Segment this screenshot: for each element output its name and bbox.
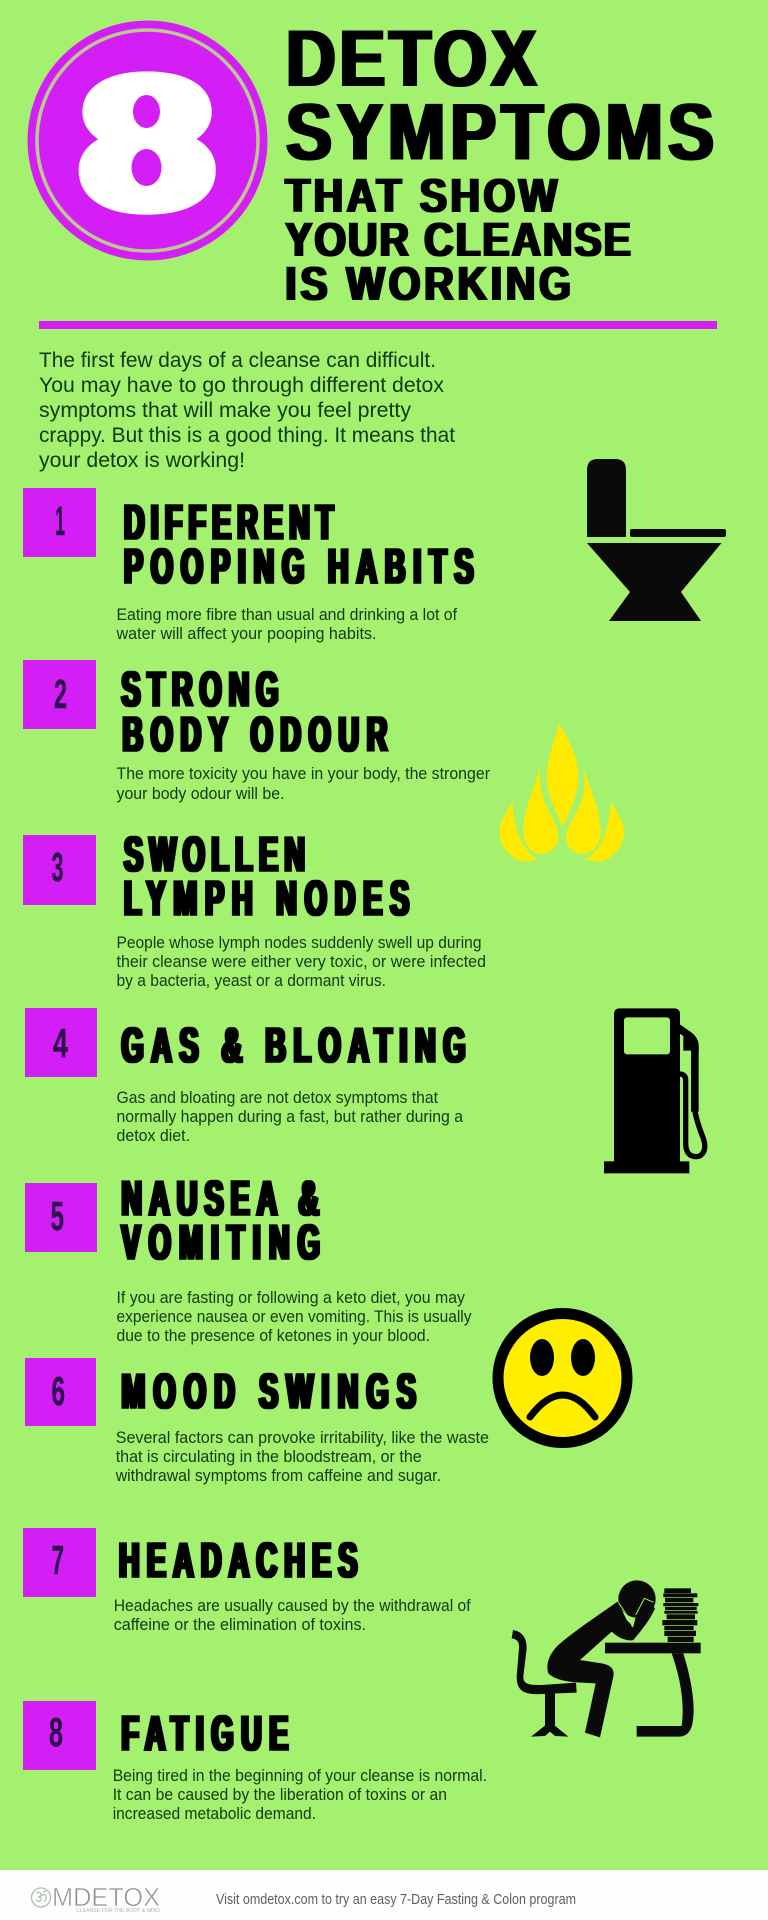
description 6: that is circulating in the bloodstream, or the <box>116 1447 422 1466</box>
description 7: caffeine or the elimination of toxins. <box>114 1615 366 1634</box>
heading 7: HEADACHES <box>119 1534 357 1588</box>
heading 3: LYMPH NODES <box>124 872 409 926</box>
number badge 2: 2 <box>54 671 67 717</box>
number badge 5: 5 <box>50 1193 64 1239</box>
heading 4: GAS & BLOATING <box>122 1019 465 1073</box>
panel: symptom 3 <box>23 828 486 990</box>
description 2 <box>116 764 490 803</box>
heading 1: DIFFERENT <box>124 496 334 550</box>
intro text: your detox is working! <box>39 449 245 472</box>
title: IS WORKING <box>285 258 571 311</box>
logo: om detox: CLEANSE FOR THE BODY & MIND <box>76 1908 160 1914</box>
icon: purple circle with number 8: 8 <box>82 43 213 244</box>
number badge 2 <box>23 660 96 729</box>
title: THAT SHOW <box>285 170 557 223</box>
number badge 6 <box>25 1358 96 1426</box>
description 7: Headaches are usually caused by the withdrawal of <box>114 1596 471 1615</box>
panel: symptom 8 <box>23 1701 487 1823</box>
heading 5: VOMITING <box>122 1216 320 1270</box>
footer bar <box>0 1870 768 1920</box>
icon: flames <box>499 723 624 861</box>
heading 3 <box>124 828 409 926</box>
number badge 5 <box>25 1183 97 1252</box>
description 5: due to the presence of ketones in your blood. <box>116 1326 430 1345</box>
description 4 <box>116 1088 464 1145</box>
description 2: The more toxicity you have in your body, the stronger <box>116 764 490 783</box>
panel: symptom 6 <box>25 1358 489 1485</box>
number badge 3 <box>23 835 96 905</box>
icon: purple circle with number 8 <box>28 20 268 260</box>
description 2: your body odour will be. <box>116 784 284 803</box>
description 8: Being tired in the beginning of your cleanse is normal. <box>113 1766 487 1785</box>
title: DETOX <box>286 13 537 103</box>
description 8: It can be caused by the liberation of toxins or an <box>113 1785 447 1804</box>
title: SYMPTOMS <box>286 86 714 177</box>
intro text: symptoms that will make you feel pretty <box>39 399 412 422</box>
description 6: withdrawal symptoms from caffeine and sugar. <box>115 1466 441 1485</box>
title: YOUR CLEANSE <box>285 214 631 267</box>
description 3: their cleanse were either very toxic, or were infected <box>116 952 486 971</box>
description 1 <box>116 605 457 643</box>
description 5: experience nausea or even vomiting. This is usually <box>116 1307 472 1326</box>
heading 5 <box>122 1172 320 1270</box>
heading 3: SWOLLEN <box>124 828 305 882</box>
heading 2: STRONG <box>122 663 278 717</box>
heading 1 <box>124 496 473 594</box>
footer text: Visit omdetox.com to try an easy 7-Day Fasting & Colon program <box>216 1891 576 1908</box>
description 8: increased metabolic demand. <box>113 1804 316 1823</box>
title <box>285 13 714 311</box>
logo: om detox: MDETOX <box>52 1882 160 1912</box>
description 5: If you are fasting or following a keto diet, you may <box>116 1288 465 1307</box>
number badge 1 <box>23 488 96 557</box>
number badge 7: 7 <box>52 1537 64 1583</box>
description 3: by a bacteria, yeast or a dormant virus. <box>116 971 386 990</box>
description 6 <box>115 1428 489 1485</box>
intro text: crappy. But this is a good thing. It means that <box>39 424 455 447</box>
heading 2 <box>122 663 387 762</box>
heading 6: MOOD SWINGS <box>122 1365 416 1419</box>
description 3 <box>116 933 486 990</box>
number badge 3: 3 <box>52 844 64 890</box>
panel: symptom 1 <box>23 488 473 643</box>
description 4: normally happen during a fast, but rather during a <box>116 1107 464 1126</box>
heading 8: FATIGUE <box>122 1707 288 1761</box>
description 8 <box>113 1766 487 1823</box>
description 5 <box>116 1288 472 1345</box>
number badge 4 <box>25 1008 97 1077</box>
icon: tired person at desk <box>512 1580 701 1737</box>
number badge 7 <box>23 1528 96 1597</box>
intro text: The first few days of a cleanse can difficult. <box>39 349 436 372</box>
panel: symptom 4 <box>25 1008 465 1145</box>
heading 1: POOPING HABITS <box>124 540 473 594</box>
heading 5: NAUSEA & <box>122 1172 319 1226</box>
number badge 4: 4 <box>53 1020 68 1066</box>
description 1: water will affect your pooping habits. <box>116 624 376 643</box>
description 6: Several factors can provoke irritability, like the waste <box>116 1428 489 1447</box>
number badge 8 <box>23 1701 96 1770</box>
panel: symptom 7 <box>23 1528 471 1634</box>
panel: symptom 2 <box>23 660 490 803</box>
icon: fuel pump <box>604 1008 705 1173</box>
description 7 <box>114 1596 471 1634</box>
number badge 1: 1 <box>55 498 65 544</box>
description 4: Gas and bloating are not detox symptoms that <box>116 1088 438 1107</box>
heading 2: BODY ODOUR <box>122 708 387 762</box>
description 4: detox diet. <box>116 1126 190 1145</box>
description 3: People whose lymph nodes suddenly swell up during <box>116 933 482 952</box>
intro text <box>39 349 455 472</box>
intro text: You may have to go through different detox <box>39 374 444 397</box>
number badge 8: 8 <box>49 1709 63 1755</box>
panel: symptom 5 <box>25 1172 472 1345</box>
description 1: Eating more fibre than usual and drinking a lot of <box>116 605 457 624</box>
icon: sad face <box>498 1314 627 1442</box>
icon: toilet <box>587 459 726 621</box>
number badge 6: 6 <box>52 1368 65 1414</box>
